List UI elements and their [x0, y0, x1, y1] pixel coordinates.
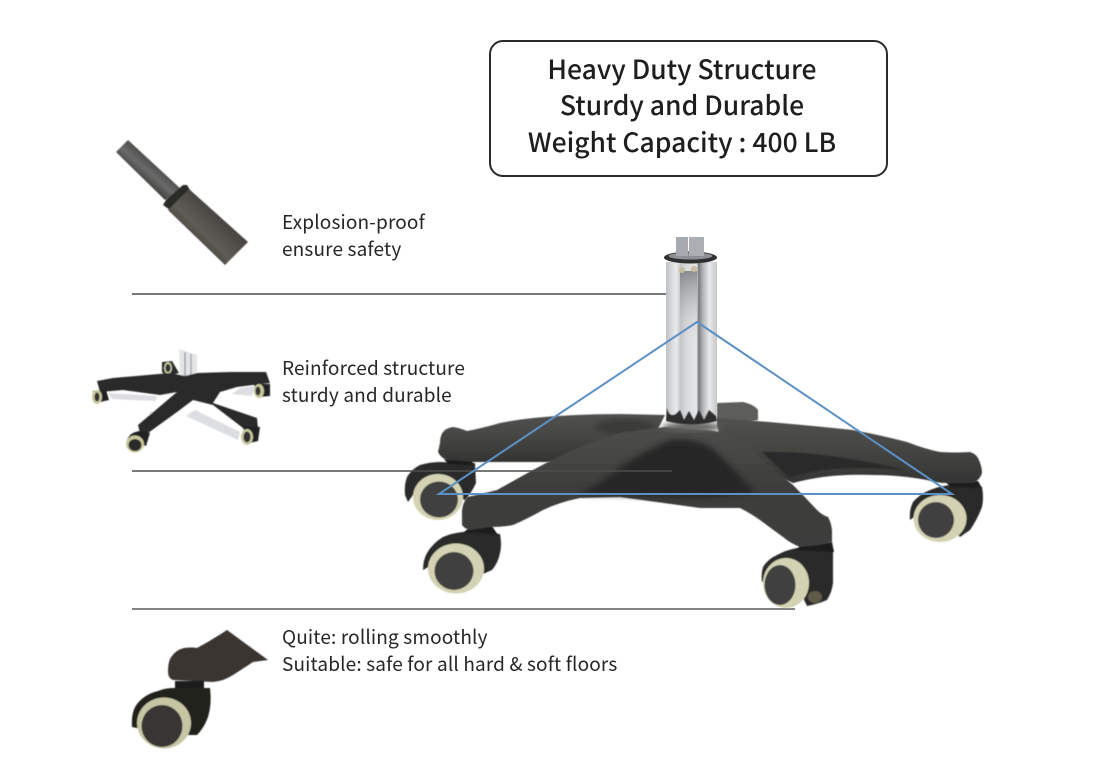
icon: small five-star base	[92, 349, 270, 452]
text: rolling smoothly: Suitable: safe for all hard & soft floors	[282, 650, 617, 677]
upper shaft right	[689, 237, 704, 256]
piston shaft	[116, 140, 182, 200]
right arm recess	[762, 452, 905, 478]
leader line: base	[132, 470, 672, 472]
rim	[914, 495, 966, 542]
piston body	[168, 189, 248, 265]
text: reinforced structure: sturdy and durable	[282, 381, 452, 408]
housing	[405, 462, 476, 502]
hub	[764, 565, 796, 605]
caster hub	[142, 705, 182, 747]
callout: heavy duty structure: Weight Capacity : 400 LB	[528, 121, 836, 160]
caster front left	[126, 431, 150, 452]
white column stub	[179, 349, 197, 378]
text: explosion-proof: Explosion-proof	[282, 208, 425, 235]
left arm	[438, 414, 665, 462]
hub	[918, 502, 954, 538]
hub top	[662, 422, 722, 432]
text: reinforced structure	[282, 354, 465, 408]
channel shade	[680, 271, 697, 341]
rim	[428, 544, 484, 594]
back arm bump	[717, 402, 758, 428]
text: rolling smoothly	[282, 623, 617, 677]
text: explosion-proof	[282, 208, 426, 262]
text: rolling smoothly: Quite: rolling smoothly	[282, 623, 488, 650]
callout: heavy duty structure: Heavy Duty Structure	[547, 48, 817, 87]
leader line: gas lift	[132, 293, 672, 295]
piston collar	[163, 185, 190, 210]
silver reflections	[108, 386, 256, 440]
callout: heavy duty structure: Sturdy and Durable	[560, 84, 804, 123]
bolts	[679, 267, 685, 273]
five-star base with casters	[132, 237, 983, 608]
left arm recess	[595, 419, 655, 435]
collar	[664, 252, 717, 264]
chrome column	[664, 237, 717, 424]
hub	[420, 482, 458, 518]
callout: heavy duty structure	[489, 40, 888, 177]
caster: front right	[762, 548, 833, 608]
caster neck	[175, 681, 204, 690]
rim	[413, 474, 463, 520]
rim	[763, 558, 809, 608]
caster: right	[910, 485, 983, 542]
inner collar	[668, 252, 712, 260]
caster: front left	[423, 532, 501, 594]
caster: back left	[405, 462, 476, 520]
text: reinforced structure: Reinforced structure	[282, 354, 465, 381]
leader line: caster	[132, 608, 795, 610]
caster front right	[241, 426, 260, 445]
blue stability triangle	[439, 322, 952, 494]
icon: small caster wheel	[132, 630, 268, 748]
column body	[666, 262, 717, 423]
housing	[423, 532, 501, 574]
rear wheel	[162, 361, 179, 376]
hub	[434, 552, 474, 590]
caster housing	[132, 688, 211, 735]
star arms	[97, 372, 270, 433]
caster arm	[168, 630, 268, 682]
icon: gas lift cylinder	[116, 140, 248, 265]
front hub shadow	[580, 440, 755, 498]
flutes	[666, 408, 717, 424]
right arm	[717, 418, 982, 483]
caster right	[254, 384, 270, 398]
front arms	[462, 427, 832, 547]
caster rim	[137, 698, 191, 748]
housing	[762, 548, 833, 606]
caster necks	[444, 459, 982, 552]
text: explosion-proof: ensure safety	[282, 235, 401, 262]
back rim glimpse	[808, 591, 822, 603]
caster left	[92, 390, 109, 404]
upper shaft left	[676, 237, 688, 256]
housing	[910, 485, 983, 537]
